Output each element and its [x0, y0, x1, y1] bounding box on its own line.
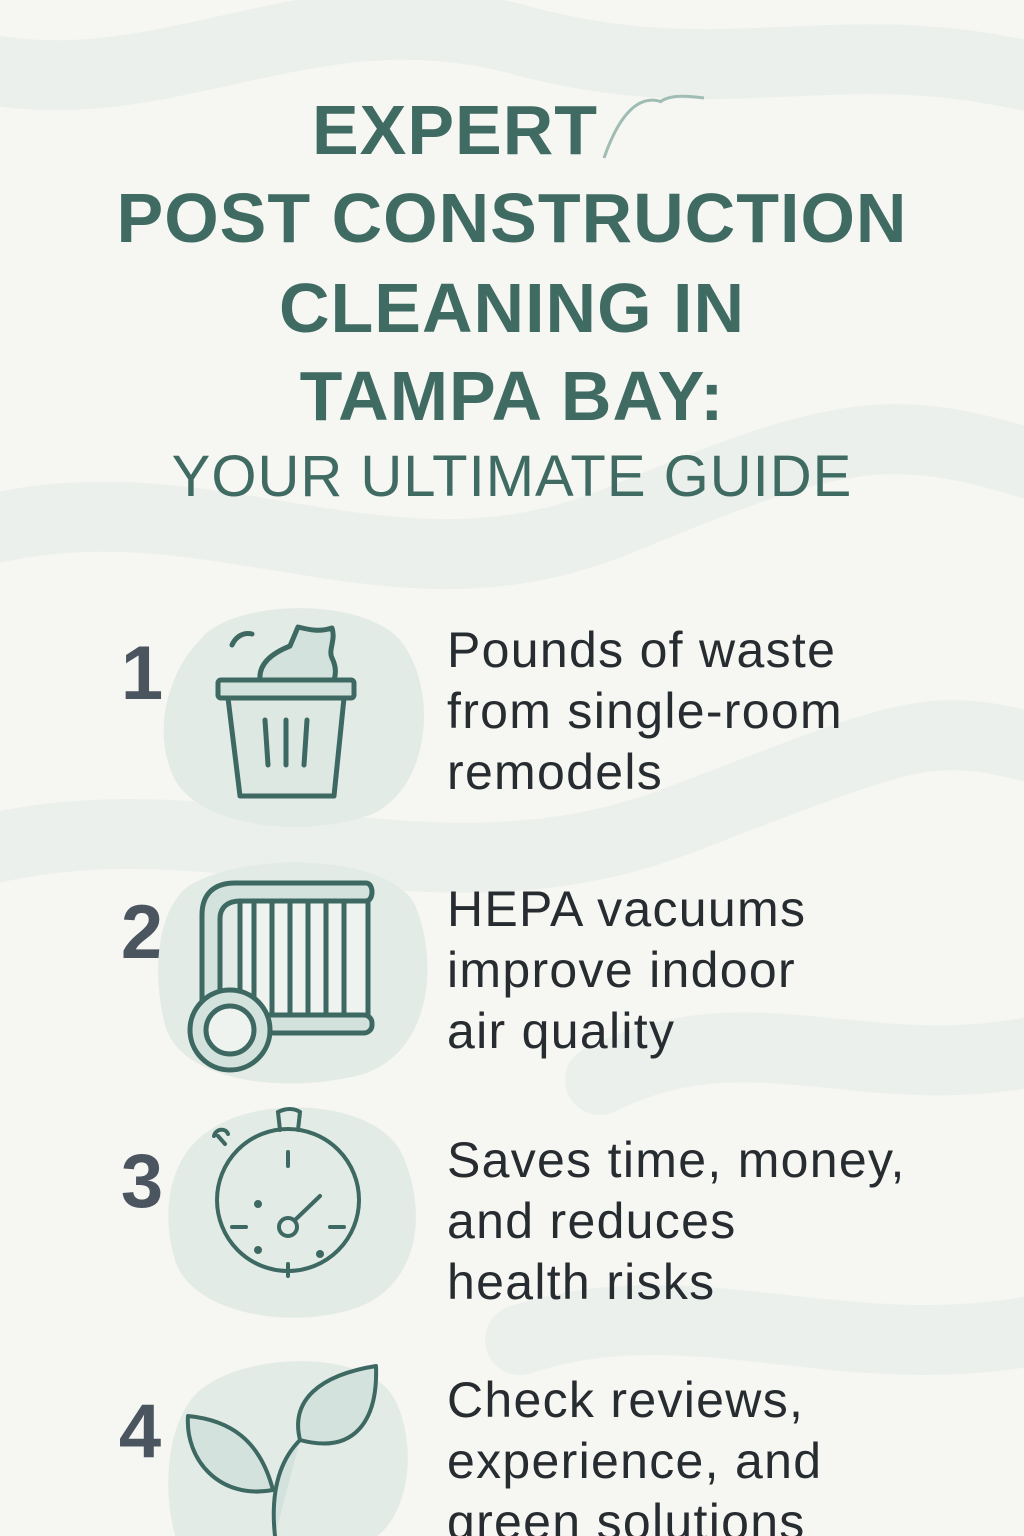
number 4: 4	[119, 1389, 161, 1474]
number 1: 1	[121, 631, 163, 716]
text 4: Check reviews,	[447, 1372, 804, 1428]
title	[117, 91, 907, 509]
text 1: Pounds of waste	[447, 622, 836, 678]
text 4: experience, and	[447, 1433, 822, 1489]
title: POST CONSTRUCTION	[117, 179, 907, 257]
title: EXPERT	[312, 91, 598, 169]
item 2	[121, 862, 806, 1084]
icon: trash bin	[164, 608, 424, 827]
text 2: HEPA vacuums	[447, 881, 806, 937]
text 2	[447, 881, 806, 1059]
text 3	[447, 1132, 906, 1310]
text 3: Saves time, money,	[447, 1132, 906, 1188]
text 1	[447, 622, 843, 800]
icon: leaf	[168, 1361, 408, 1536]
text 3: health risks	[447, 1254, 715, 1310]
title: TAMPA BAY:	[300, 357, 724, 435]
icon: stopwatch	[168, 1107, 416, 1318]
text 2: air quality	[447, 1003, 675, 1059]
item 1	[121, 608, 843, 827]
item 3	[121, 1107, 906, 1318]
text 3: and reduces	[447, 1193, 736, 1249]
title: YOUR ULTIMATE GUIDE	[172, 444, 852, 509]
number 3: 3	[121, 1139, 163, 1224]
icon: HEPA vacuum	[158, 862, 428, 1084]
decorative swoosh near title	[602, 94, 704, 158]
item 4	[119, 1361, 822, 1536]
text 4	[447, 1372, 822, 1536]
text 2: improve indoor	[447, 942, 796, 998]
title: CLEANING IN	[279, 269, 745, 347]
text 1: remodels	[447, 744, 663, 800]
number 2: 2	[121, 890, 163, 975]
text 1: from single-room	[447, 683, 843, 739]
